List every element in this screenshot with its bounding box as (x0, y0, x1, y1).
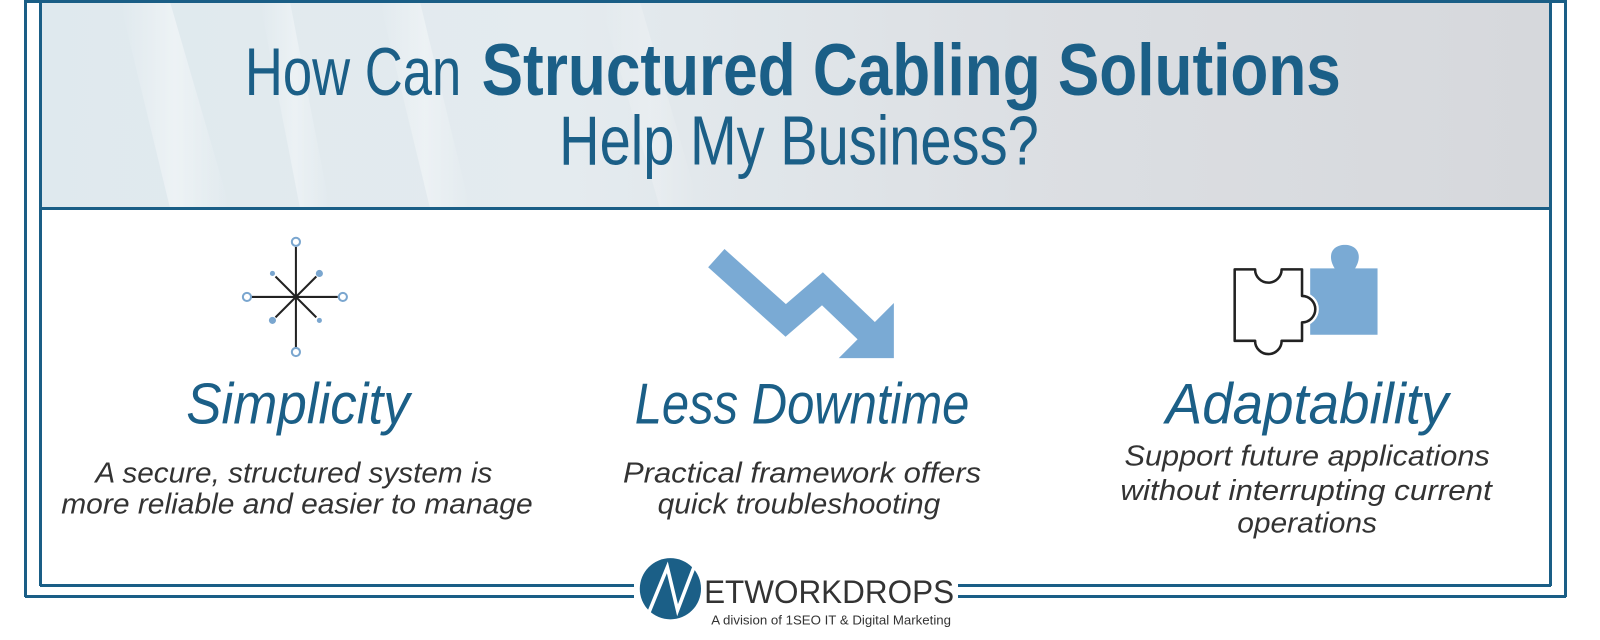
title: Structured Cabling Solutions (482, 28, 1341, 111)
text: downtime body: quick troubleshooting (658, 488, 940, 520)
logo (640, 558, 954, 627)
text: adaptability body: Support future applications (1124, 440, 1490, 472)
text: simplicity body: more reliable and easier to manage (61, 488, 533, 520)
icon: network star (243, 238, 347, 356)
text: adaptability body (1120, 440, 1493, 540)
heading: Simplicity: Simplicity (186, 372, 413, 436)
heading: Less Downtime: Less Downtime (635, 372, 969, 436)
text: adaptability body: without interrupting current (1120, 475, 1493, 507)
title (245, 28, 1341, 179)
heading: Adaptability: Adaptability (1163, 372, 1452, 436)
text: simplicity body: A secure, structured system is (93, 458, 492, 490)
text: downtime body: Practical framework offers (623, 458, 981, 490)
logo: ETWORKDROPS (704, 573, 954, 610)
header panel background (41, 2, 1550, 208)
logo: A division of 1SEO IT & Digital Marketing (711, 612, 951, 627)
title: Help My Business? (559, 101, 1039, 179)
title: How Can (245, 35, 461, 110)
icon: puzzle (1235, 245, 1378, 354)
icon: down arrow (716, 258, 894, 358)
text: adaptability body: operations (1237, 508, 1377, 540)
text: simplicity body (61, 458, 533, 520)
text: downtime body (623, 458, 981, 520)
